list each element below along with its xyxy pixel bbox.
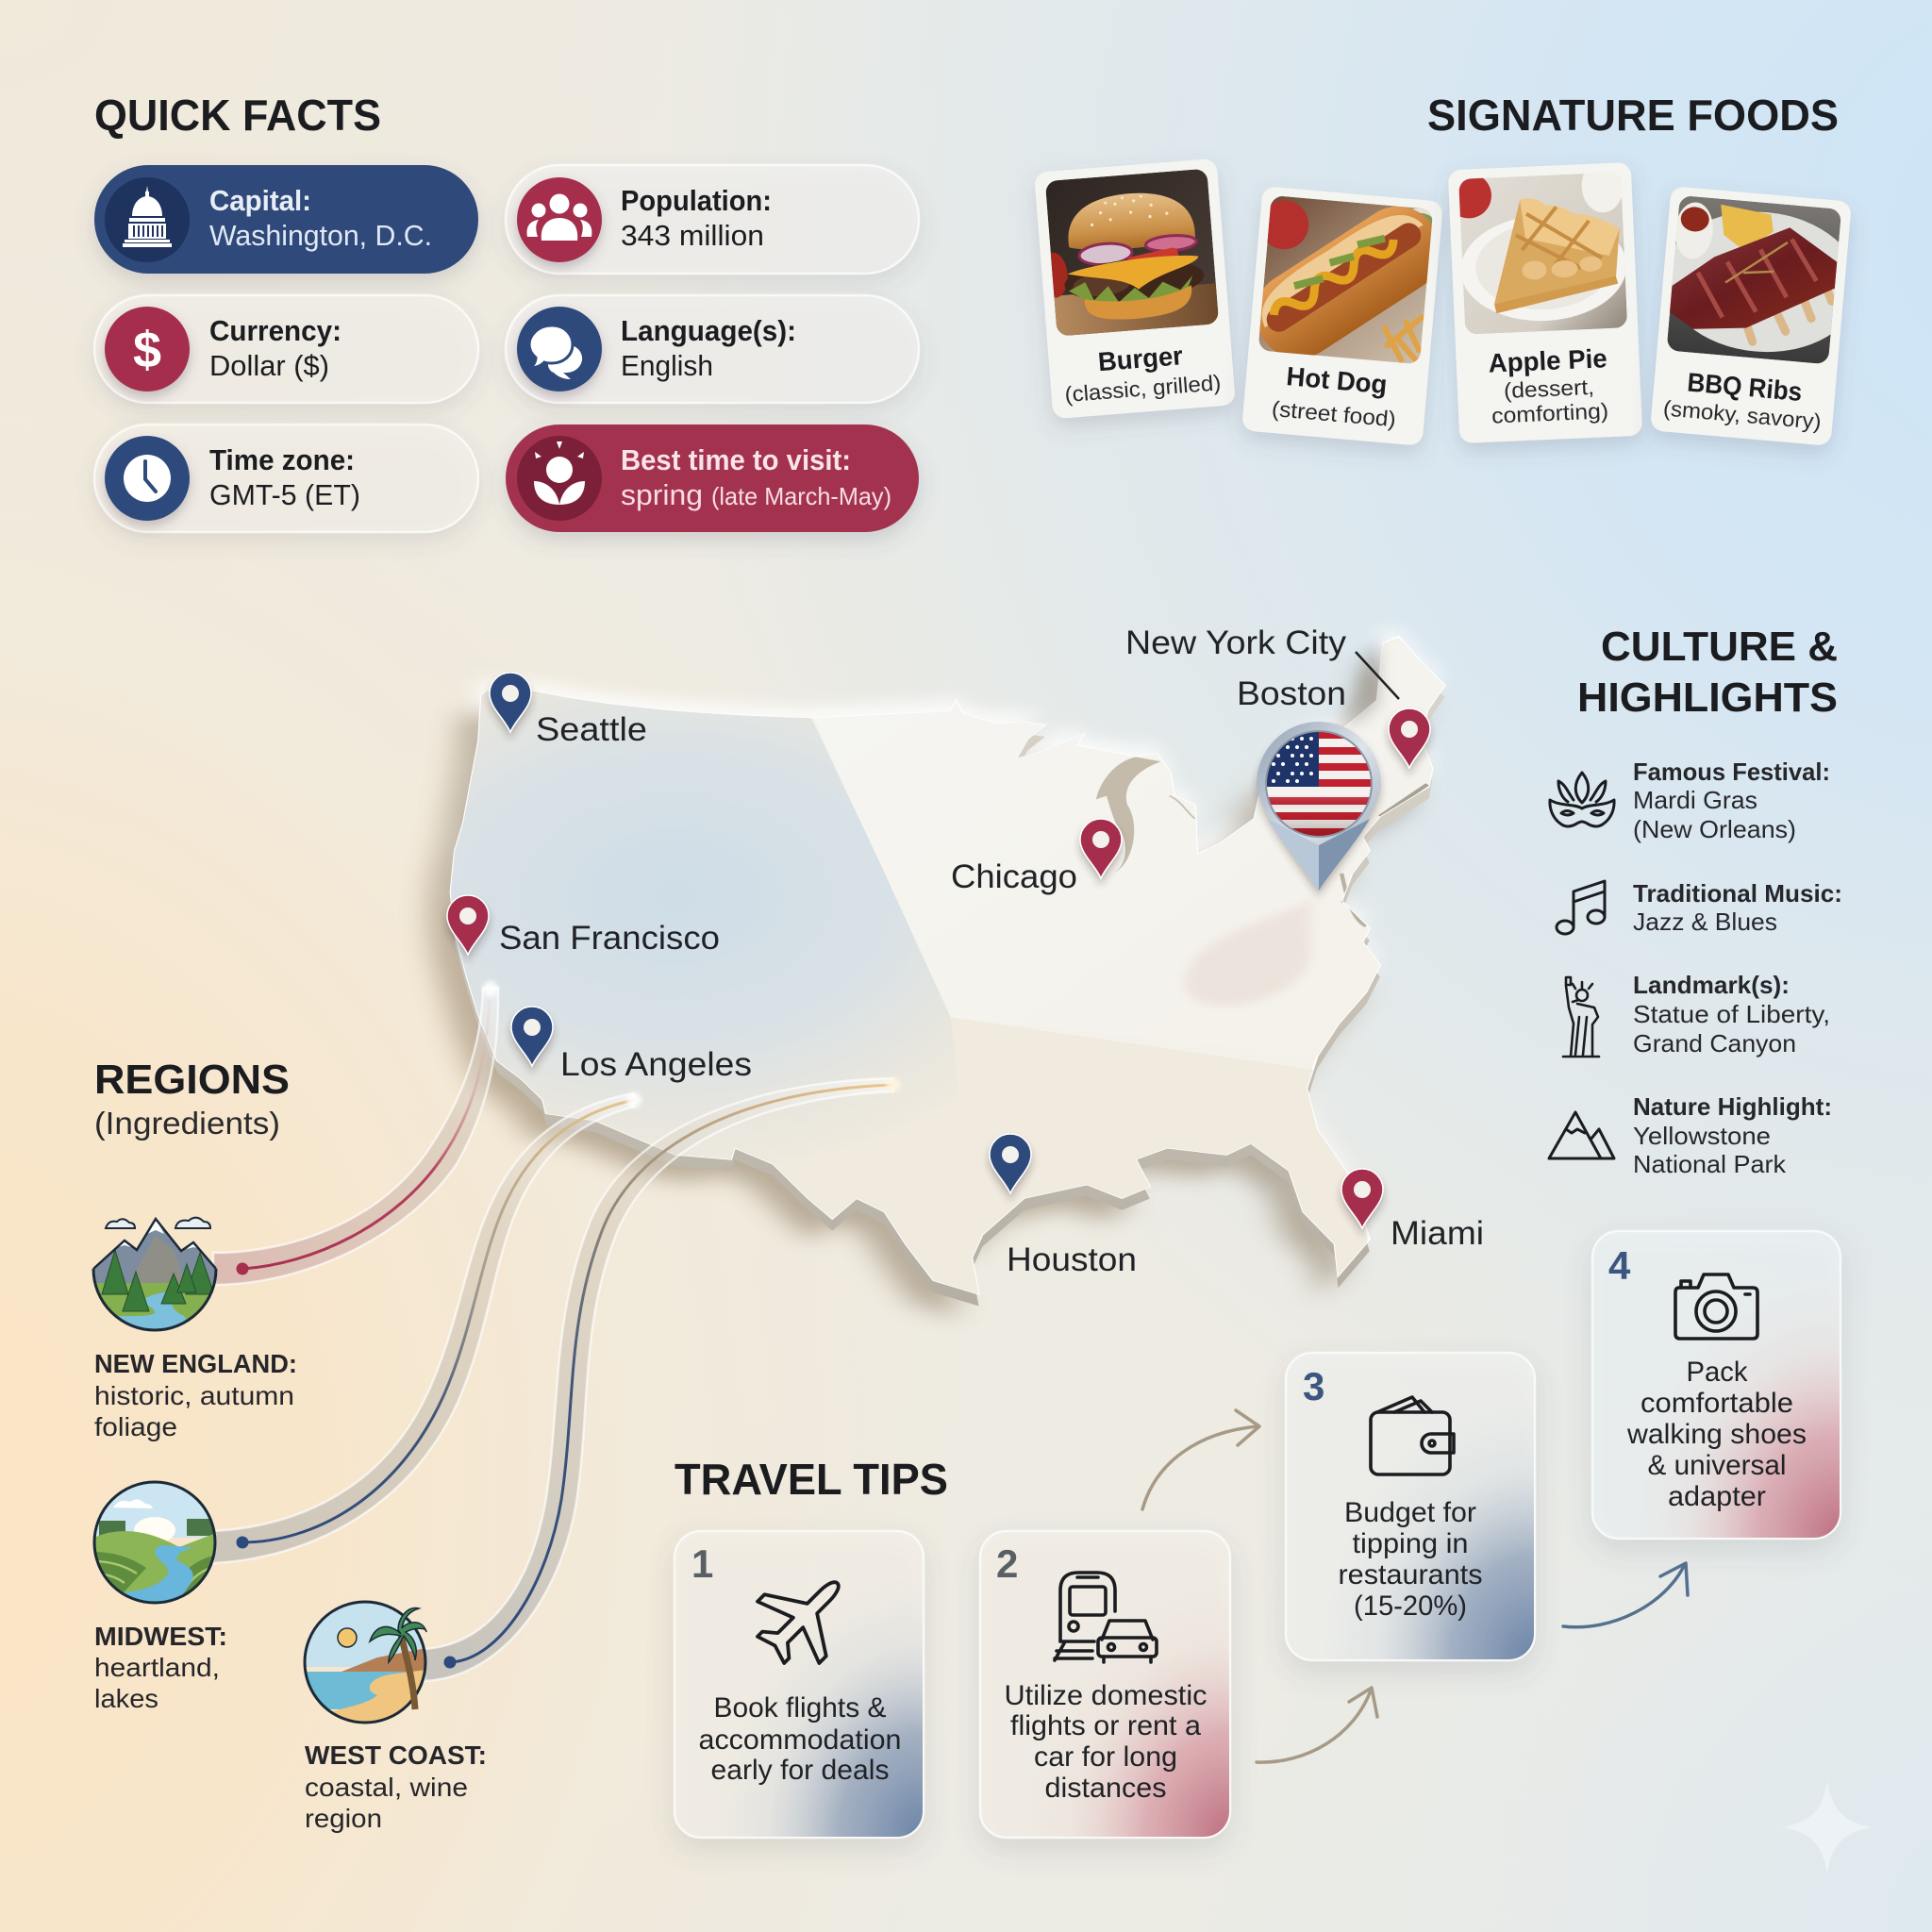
heading: culture and highlights: CULTURE & [1601, 624, 1838, 670]
image: hot dog [1258, 196, 1432, 364]
food card: burger: (classic, grilled) [1064, 370, 1222, 407]
pill: language: Language(s): [621, 314, 796, 347]
text: tip 3: (15-20%) [1354, 1591, 1467, 1622]
food card: bbq ribs [1650, 186, 1867, 447]
map labels: Los Angeles [560, 1046, 752, 1083]
heading: regions: REGIONS [94, 1057, 290, 1103]
connector: west coast [425, 1077, 901, 1681]
text: tip 2: car for long [1034, 1741, 1177, 1773]
map labels: New York City [1125, 625, 1347, 661]
panel: culture list [1549, 758, 1842, 1178]
tip card 2 [980, 1531, 1230, 1838]
icon: capitol building [123, 186, 172, 247]
text: nature: Nature Highlight: [1633, 1092, 1832, 1121]
icon: wallet [1371, 1397, 1454, 1474]
connector: midwest [213, 1092, 641, 1563]
pill: currency: Currency: [209, 314, 341, 347]
text: festival: (New Orleans) [1633, 815, 1796, 843]
pin: boston [1389, 708, 1430, 768]
pill: population [506, 165, 919, 274]
panel: quick facts pills [94, 165, 919, 532]
text: new england: foliage [94, 1412, 177, 1441]
icon: music notes [1557, 881, 1605, 934]
pill: capital: Capital: [209, 184, 311, 217]
text: west coast [305, 1740, 487, 1833]
text: tip 3 [1338, 1497, 1483, 1622]
text: midwest: MIDWEST: [94, 1622, 227, 1651]
pin: chicago [1080, 819, 1122, 878]
icon: people [527, 194, 591, 241]
pill: time zone: GMT-5 (ET) [209, 478, 360, 511]
text: tip 4: Pack [1687, 1357, 1748, 1388]
tip card 1 [675, 1531, 924, 1838]
icon: camera [1675, 1274, 1757, 1339]
arrow: blue [1563, 1563, 1688, 1627]
map labels: Houston [1007, 1241, 1137, 1278]
text: landmarks [1633, 971, 1830, 1058]
text: midwest: heartland, [94, 1653, 220, 1682]
food card: bbq ribs: (smoky, savory) [1662, 395, 1823, 434]
tip card 3 [1286, 1353, 1535, 1660]
food card: apple pie: (dessert, [1503, 375, 1594, 403]
heading: regions [94, 1057, 290, 1141]
text: nature [1633, 1092, 1832, 1178]
pill: best time to visit [506, 425, 919, 532]
text: tip 4: comfortable [1641, 1388, 1793, 1419]
map labels: Miami [1391, 1215, 1484, 1252]
text: tip 2: flights or rent a [1010, 1710, 1201, 1741]
pill: currency [94, 295, 478, 403]
heading: quick facts: QUICK FACTS [94, 91, 381, 140]
pill: population: Population: [621, 184, 772, 217]
tip card 2: 2 [996, 1541, 1018, 1586]
food card: bbq ribs: BBQ Ribs [1686, 367, 1804, 407]
food card: hot dog: Hot Dog [1285, 361, 1389, 399]
text: landmarks: Grand Canyon [1633, 1029, 1796, 1058]
map labels: San Francisco [499, 920, 720, 957]
heading: regions: (Ingredients) [94, 1106, 280, 1141]
heading: travel tips: TRAVEL TIPS [675, 1455, 948, 1504]
icon: train and car [1055, 1573, 1157, 1662]
arrow: tan lower [1257, 1688, 1377, 1762]
icon: new england landscape [93, 1218, 216, 1340]
text: music: Traditional Music: [1633, 879, 1842, 908]
heading: culture and highlights: HIGHLIGHTS [1577, 675, 1838, 721]
text: west coast: region [305, 1804, 382, 1833]
pill: currency: Dollar ($) [209, 349, 329, 382]
text: tip 4: & universal [1647, 1450, 1787, 1481]
tip card 4 [1592, 1231, 1840, 1539]
pill: language [506, 295, 919, 403]
pill: time zone: Time zone: [209, 443, 355, 476]
pin: seattle [490, 673, 531, 732]
map pins [447, 673, 1430, 1228]
pin: los angeles [511, 1007, 553, 1066]
image: apple pie [1458, 173, 1627, 334]
map labels: Boston [1237, 675, 1346, 712]
pill: best time to visit: spring [621, 478, 703, 511]
icon: sparkle watermark [1781, 1780, 1874, 1874]
text: tip 4: walking shoes [1626, 1419, 1807, 1450]
text: tip 3: tipping in [1353, 1528, 1468, 1559]
tip card 1: 1 [691, 1541, 713, 1586]
icon: statue of liberty [1563, 977, 1599, 1057]
text: west coast: coastal, wine [305, 1773, 468, 1802]
panel: signature foods cards [1033, 158, 1867, 448]
icon: sun and leaves [534, 441, 585, 505]
text: festival: Famous Festival: [1633, 758, 1830, 786]
heading: culture and highlights [1577, 624, 1838, 721]
food card: hot dog [1237, 187, 1447, 458]
icon: midwest landscape [93, 1481, 216, 1613]
map labels: Seattle [536, 711, 647, 748]
icon: mountains [1549, 1112, 1614, 1158]
heading: signature foods: SIGNATURE FOODS [1427, 91, 1839, 140]
flag pin [1257, 722, 1381, 891]
text: landmarks: Statue of Liberty, [1633, 1000, 1830, 1028]
icon: chat bubbles [529, 325, 582, 379]
icon: plane [740, 1553, 868, 1681]
image: bbq ribs [1668, 196, 1841, 364]
text: music: Jazz & Blues [1633, 908, 1777, 936]
text: new england [94, 1349, 297, 1441]
text: music [1633, 879, 1842, 936]
map labels: Chicago [951, 858, 1077, 895]
pin: san francisco [447, 895, 489, 955]
text: tip 3: Budget for [1344, 1497, 1476, 1528]
pill: language: English [621, 349, 713, 382]
pill: population: 343 million [621, 219, 764, 252]
food card: burger: Burger [1097, 341, 1184, 376]
text: tip 4 [1626, 1357, 1807, 1512]
text: tip 1: accommodation [698, 1724, 902, 1756]
text: landmarks: Landmark(s): [1633, 971, 1790, 999]
food card: hot dog: (street food) [1271, 396, 1397, 431]
image: burger [1034, 169, 1219, 338]
text: midwest [94, 1622, 227, 1713]
text: nature: National Park [1633, 1150, 1787, 1178]
icon: clock [124, 455, 171, 502]
tip card 4: 4 [1608, 1243, 1631, 1288]
text: new england: historic, autumn [94, 1381, 294, 1410]
icon: festival mask [1550, 773, 1614, 826]
food card: apple pie: comforting) [1491, 398, 1609, 428]
pill: capital: Washington, D.C. [209, 219, 432, 252]
pill: time zone [94, 425, 478, 532]
text: nature: Yellowstone [1633, 1122, 1771, 1150]
shadow: new england inland side [1338, 641, 1379, 722]
pin: miami [1341, 1169, 1383, 1228]
pill: best time to visit: Best time to visit: [621, 443, 851, 476]
food card: apple pie: Apple Pie [1488, 343, 1607, 378]
food card: burger [1033, 158, 1236, 419]
text: tip 2: Utilize domestic [1004, 1680, 1208, 1711]
pill: best time to visit: (late March-May) [711, 482, 891, 510]
food card: apple pie [1445, 158, 1642, 443]
connector: new england [213, 981, 498, 1285]
text: midwest: lakes [94, 1684, 158, 1713]
text: festival: Mardi Gras [1633, 786, 1757, 814]
arrow: tan upper [1142, 1410, 1259, 1509]
text: tip 3: restaurants [1338, 1559, 1483, 1591]
map: USA 3D outline [396, 625, 1485, 1317]
text: tip 1 [698, 1692, 902, 1786]
text: tip 1: Book flights & [713, 1692, 887, 1724]
text: tip 2 [1004, 1680, 1208, 1804]
text: festival [1633, 758, 1830, 843]
tip card 3: 3 [1303, 1364, 1324, 1408]
text: new england: NEW ENGLAND: [94, 1349, 297, 1378]
icon: dollar: $ [133, 322, 161, 378]
text: tip 1: early for deals [711, 1755, 889, 1786]
pill: capital [94, 165, 478, 274]
icon: west coast landscape [304, 1601, 426, 1726]
text: west coast: WEST COAST: [305, 1740, 487, 1770]
text: tip 4: adapter [1668, 1481, 1766, 1512]
text: tip 2: distances [1045, 1773, 1166, 1804]
pin: houston [990, 1134, 1031, 1193]
map labels [499, 625, 1484, 1278]
